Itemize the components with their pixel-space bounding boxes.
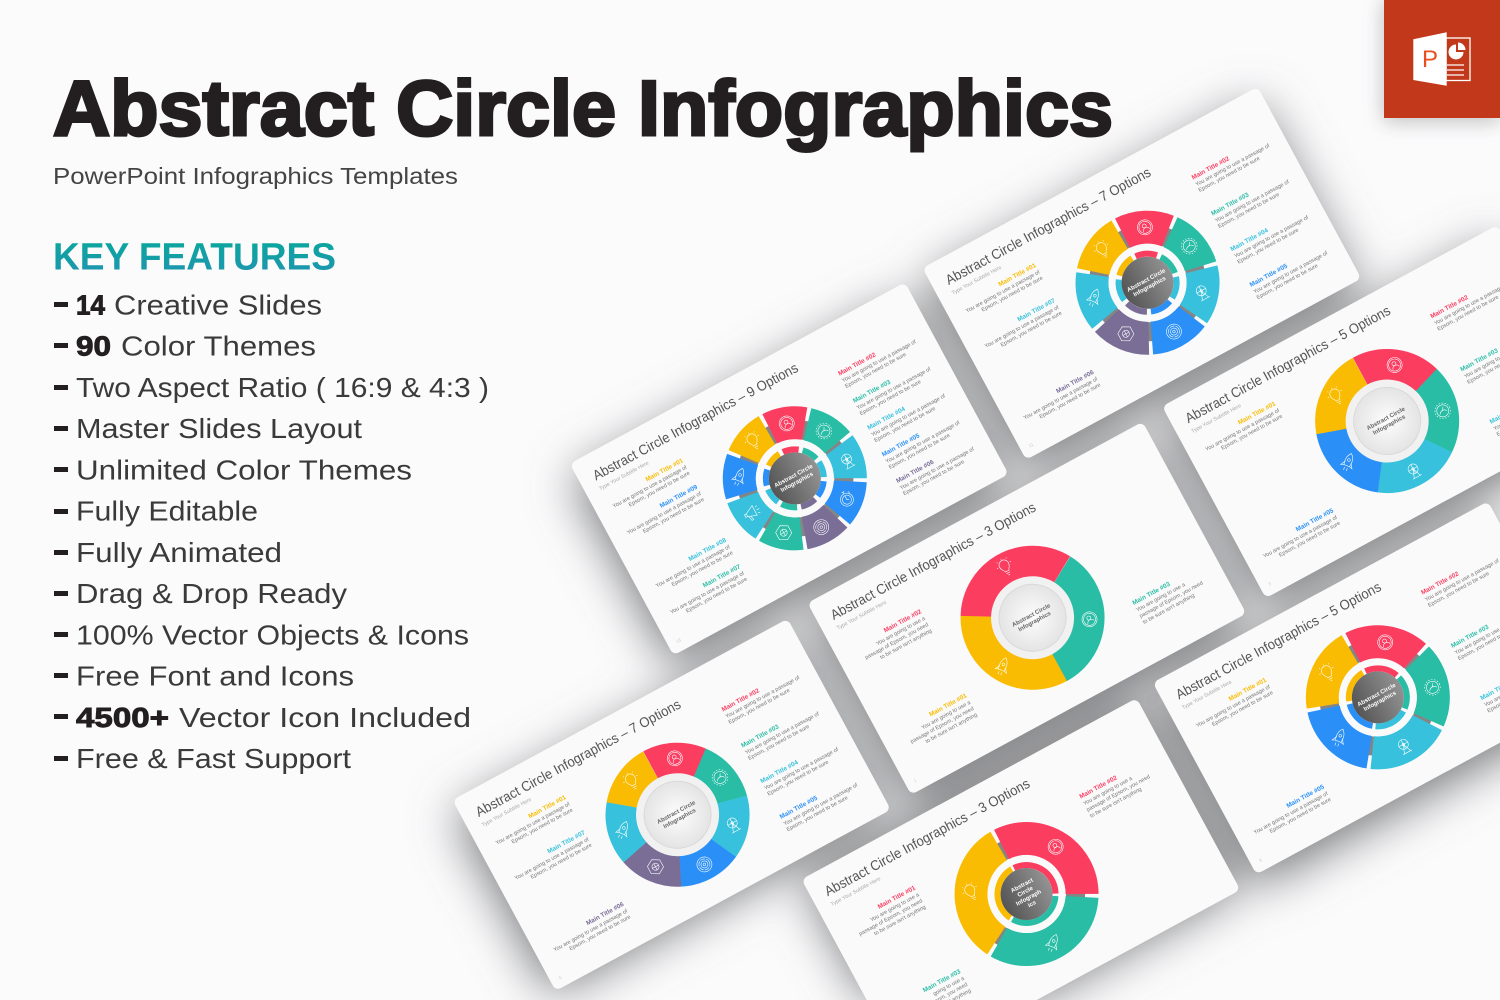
- text: main title 03: to be sure isn't anything: [1142, 593, 1196, 626]
- slide title: Abstract Circle Infographics – 3 Options: [828, 499, 1038, 623]
- gap shading: [728, 412, 861, 545]
- feature: aspect ratio: Two Aspect Ratio ( 16:9 & 4:3 ): [76, 372, 489, 403]
- text: main title 03: Main Title #03: [740, 723, 781, 750]
- icon: stopwatch: [837, 489, 856, 508]
- text: main title 02: to be sure isn't anything: [879, 628, 933, 661]
- slide title: Abstract Circle Infographics – 5 Options: [1173, 578, 1384, 702]
- feature: 4500+ vector icon: Vector Icon Included: [179, 702, 471, 733]
- center disc: Infographics: [663, 808, 698, 830]
- feature: 4500+ vector icon: 4500+: [76, 702, 169, 733]
- slide: 3 options with hub: [801, 698, 1240, 1000]
- text: main title 05: Main Title #05: [1285, 783, 1326, 810]
- icon: maze: [811, 517, 831, 537]
- icon: gauge: [813, 420, 835, 442]
- feature: fully animated: Fully Animated: [76, 537, 282, 568]
- text: main title 03: Main Title #03: [1210, 191, 1251, 218]
- text: main title 01: [851, 884, 928, 944]
- page number: 9: [1258, 857, 1263, 863]
- icon: PowerPoint logo: P: [1422, 46, 1438, 73]
- icon: badge: [1045, 837, 1066, 857]
- text: main title 05: Main Title #05: [1249, 263, 1289, 289]
- slide: 5 options with hub: [1153, 501, 1500, 874]
- center hub: [991, 859, 1062, 929]
- text: main title 01: Epsom, you need to be sure: [1220, 414, 1284, 452]
- icon: bulb: [994, 555, 1016, 578]
- text: main title 01: Main Title #01: [997, 262, 1038, 288]
- slide title: Abstract Circle Infographics – 5 Options: [1182, 302, 1393, 426]
- text: main title 06: Main Title #06: [1055, 369, 1096, 395]
- wheel: 3 wedges: [928, 513, 1137, 722]
- icon: rocket: [994, 656, 1012, 677]
- icon: rocket: [1331, 727, 1348, 748]
- text: main title 02: Main Title #02: [721, 687, 761, 713]
- slide: 3 options with disc: [807, 422, 1246, 795]
- text: main title 05: Main Title #05: [881, 432, 921, 458]
- icon: bulb: [1091, 238, 1113, 261]
- feature: free font and icons: Free Font and Icons: [76, 660, 354, 692]
- text: main title 06: Main Title #06: [895, 459, 936, 485]
- icon: bulb: [1316, 661, 1339, 684]
- text: main title 03: Main Title #03: [1131, 581, 1172, 607]
- text: main title 07: You are going to use a passage of: [514, 837, 590, 882]
- wheel: 9 segments: [711, 395, 877, 563]
- text: main title 04: Epsom, you need to be sure: [1237, 227, 1300, 265]
- icons: [948, 532, 1101, 681]
- text: main title 03: Main Title #03: [1459, 347, 1500, 373]
- text: main title 02: [1078, 760, 1155, 819]
- white spacer: [1325, 644, 1431, 750]
- text: main title 06: Epsom, you need to be sure: [1039, 382, 1102, 420]
- text: main title 01: You are going to use a passage of: [965, 269, 1041, 315]
- icon: badge: [665, 748, 685, 768]
- feature: 4500+ vector icon: [54, 702, 471, 733]
- feature: free and fast support: Free & Fast Support: [76, 743, 351, 774]
- text: main title 06: Epsom, you need to be sure: [569, 914, 632, 952]
- text: main title 05: You are going to use a passage of: [1253, 250, 1329, 295]
- feature: 14 creative slides: Creative Slides: [114, 289, 322, 320]
- text: main title 01: Main Title #01: [527, 794, 568, 820]
- center disc: Abstract Circle: [656, 800, 697, 826]
- text: main title 02: Main Title #02: [1191, 155, 1231, 181]
- icon: maze: [694, 854, 715, 875]
- text: main title 01: Epsom, you need to be sure: [628, 471, 691, 509]
- icons: [591, 731, 763, 902]
- icon: gauge: [1432, 400, 1453, 421]
- center hub: Abstract Circle: [1357, 682, 1398, 708]
- text: main title 05: You are going to use a passage of: [783, 782, 859, 827]
- subtitle: PowerPoint Infographics Templates: [53, 163, 458, 189]
- feature: unlimited color themes: Unlimited Color Themes: [76, 454, 412, 485]
- center disc: Infographics: [1018, 611, 1053, 633]
- text: main title 01: passage of Epsom, you need: [858, 898, 924, 937]
- text: main title 04: You are going to use a passage of: [1233, 215, 1310, 260]
- center hub: Abstract: [1010, 878, 1034, 895]
- white spacer: [1095, 230, 1200, 336]
- feature: drag and drop: Drag & Drop Ready: [76, 578, 347, 609]
- slide subtitle: Type Your Subtitle Here: [830, 876, 882, 908]
- wheel: 5 wedges: [1304, 342, 1471, 508]
- text: main title 05: You are going to use a passage of: [1253, 791, 1330, 836]
- center disc: Abstract Circle: [1366, 406, 1407, 432]
- text: main title 04: [1479, 656, 1500, 714]
- heading: key features: KEY FEATURES: [53, 236, 336, 278]
- text: main title 03: going to use a: [932, 975, 966, 997]
- text: main title 03: Main Title #03: [852, 379, 892, 405]
- text: main title 03: You are going to use a passage of: [856, 366, 932, 411]
- text: main title 04: Main Title #04: [1229, 227, 1270, 253]
- text: main title 09: You are going to use a passage of: [626, 491, 703, 536]
- slide title: Abstract Circle Infographics – 7 Options: [943, 164, 1153, 288]
- text: main title 02: Main Title #02: [837, 351, 878, 378]
- text: main title 02: passage of Epsom, you need: [1086, 774, 1151, 813]
- center hub: [760, 443, 830, 514]
- panel: PowerPoint badge: [1384, 0, 1500, 118]
- page number: 1: [913, 778, 918, 783]
- text: main title 01: to be sure isn't anything: [873, 904, 927, 937]
- text: main title 05: You are going to use a passage of: [1262, 515, 1339, 560]
- feature: 90 color themes: [54, 330, 316, 362]
- center disc: Abstract Circle: [1011, 603, 1052, 629]
- feature: 14 creative slides: 14: [76, 289, 105, 320]
- inner ring segments: [756, 439, 834, 518]
- slide background: [922, 87, 1361, 460]
- icon: rocket: [1339, 451, 1357, 473]
- icon: bulb: [959, 880, 982, 903]
- text: main title 05: Main Title #05: [779, 795, 819, 821]
- text: main title 02: Epsom, you need to be sure: [1198, 156, 1261, 194]
- page number: 11: [1028, 442, 1035, 448]
- gap shading: [1081, 216, 1214, 349]
- icon: hexagon: [1116, 323, 1136, 344]
- icon: maze: [1164, 321, 1184, 342]
- text: main title 02: Epsom, you need to be sure: [1437, 295, 1500, 333]
- text: main title 01: You are going to use a: [869, 892, 921, 924]
- text: main title 04: You are going to use a passage of: [763, 747, 840, 792]
- text: main title 07: Main Title #07: [546, 829, 587, 855]
- icon: rocket: [1044, 932, 1062, 953]
- feature: master slides layout: Master Slides Layout: [76, 413, 362, 444]
- text: main title 04: Epsom, you need to be sure: [873, 406, 937, 444]
- text: main title 03: Epsom, you need to be sure: [1217, 192, 1281, 230]
- center hub: Circle: [1017, 885, 1035, 899]
- text: main title 04: Main Title #04: [866, 405, 907, 432]
- gap shading: [960, 828, 1093, 960]
- outer ring segments: [1303, 622, 1453, 773]
- text: main title 02: You are going to use a passage of: [1424, 558, 1500, 603]
- slide: 7 options lower with disc: [452, 619, 891, 991]
- center hub: [1343, 662, 1413, 733]
- text: main title 07: Epsom, you need to be sure: [685, 577, 749, 615]
- text: main title 02: You are going to use a passage of: [725, 675, 801, 720]
- icon: gauge: [1422, 677, 1443, 698]
- text: main title 02: You are going to use a passage of: [1195, 143, 1271, 188]
- slide subtitle: Type Your Subtitle Here: [951, 265, 1003, 297]
- slide title: Abstract Circle Infographics – 7 Options: [473, 696, 683, 820]
- feature list: [54, 289, 489, 774]
- icon: gauge: [1179, 236, 1200, 257]
- slide background: [1153, 501, 1500, 874]
- text: main title 02: Main Title #02: [1420, 570, 1461, 597]
- icon: badge: [1384, 355, 1405, 375]
- slide subtitle: Type Your Subtitle Here: [836, 600, 888, 632]
- icon: badge: [1079, 609, 1100, 629]
- center hub: Abstract Circle: [774, 463, 815, 489]
- icon: megaphone: [742, 503, 763, 522]
- inner ring segments: [987, 855, 1066, 933]
- feature: 90 color themes: Color Themes: [121, 330, 316, 362]
- soft shadow behind slides: [454, 103, 1500, 1000]
- page number: 3: [1267, 581, 1273, 587]
- text: main title 04: Epsom, you need to be sure: [767, 759, 830, 797]
- text: main title 01: Main Title #01: [877, 884, 917, 911]
- icon: ferris wheel: [840, 452, 855, 469]
- slide: 7 options top: [922, 87, 1361, 460]
- title: Abstract Circle Infographics: [53, 64, 1113, 152]
- text: main title 05: Epsom, you need to be sure: [1269, 797, 1332, 835]
- center hub: Abstract Circle: [1126, 268, 1167, 294]
- text: main title 07: Epsom, you need to be sure: [1000, 311, 1063, 349]
- slide subtitle: Type Your Subtitle Here: [481, 797, 533, 829]
- text: main title 02: Main Title #02: [1429, 294, 1470, 320]
- feature: vector objects: 100% Vector Objects & Icons: [76, 619, 469, 650]
- ring wedges: [955, 540, 1110, 695]
- icons: [1304, 343, 1471, 508]
- text: main title 08: Main Title #08: [687, 537, 728, 563]
- text: main title 01: Main Title #01: [644, 457, 685, 483]
- text: main title 09: Main Title #09: [659, 484, 699, 510]
- ring wedges: [601, 738, 754, 891]
- text: main title 02: You are going to use a: [1082, 775, 1134, 807]
- outer ring segments: [951, 819, 1102, 969]
- slide background: [570, 282, 1009, 655]
- text: main title 04: Main Title #04: [759, 759, 800, 785]
- text: main title 06: You are going to use a passage of: [1023, 376, 1099, 421]
- center disc: Infographics: [1372, 414, 1407, 437]
- feature: 90 color themes: 90: [76, 330, 111, 362]
- text: main title 01: to be sure isn't anything: [925, 712, 978, 745]
- slide subtitle: Type Your Subtitle Here: [598, 460, 650, 492]
- icon: rocket: [730, 466, 748, 487]
- text: main title 04: [1489, 380, 1500, 438]
- text: main title 02: to be sure isn't anything: [1089, 787, 1143, 819]
- text: main title 01: Epsom, you need to be sure: [981, 275, 1044, 313]
- outer ring segments: [720, 403, 870, 554]
- slide title: Abstract Circle Infographics – 3 Options: [822, 775, 1032, 899]
- text: main title 03: [1459, 327, 1500, 386]
- slide subtitle: Type Your Subtitle Here: [1191, 403, 1242, 435]
- inner ring segments: [1108, 243, 1187, 322]
- text: main title 01: Epsom, you need to be sure: [511, 807, 574, 845]
- feature: fully editable: Fully Editable: [76, 496, 258, 526]
- text: main title 05: Epsom, you need to be sure: [1256, 263, 1319, 301]
- text: main title 03: You are going to use a: [1135, 582, 1187, 613]
- text: main title 01: You are going to use a passage of: [1205, 408, 1281, 453]
- icon: ferris wheel: [1406, 462, 1422, 479]
- icon: rocket: [1085, 287, 1103, 308]
- text: main title 03: Epsom, you need to be sure: [859, 379, 922, 417]
- text: main title 01: You are going to use a: [921, 699, 973, 731]
- slide: 9 options: [570, 282, 1009, 655]
- badge shadow: [1384, 0, 1500, 121]
- outer ring segments: [1072, 208, 1223, 358]
- page number: 13: [675, 637, 682, 644]
- slide background: [1162, 225, 1500, 598]
- slide background: [452, 619, 891, 991]
- text: main title 05: Main Title #05: [1295, 507, 1335, 533]
- center hub: Infograph: [1015, 889, 1043, 908]
- text: main title 06: You are going to use a passage of: [553, 908, 629, 953]
- text: main title 01: Main Title #01: [928, 692, 969, 718]
- text: main title 01: passage of Epsom, you need: [910, 706, 975, 745]
- text: main title 02: Main Title #02: [883, 608, 923, 634]
- wheel: 5 segments: [1296, 620, 1461, 783]
- text: main title 03: You are going to use a passage of: [744, 711, 821, 756]
- text: main title 07: You are going to use a passage of: [669, 571, 746, 616]
- icons: [1296, 620, 1461, 783]
- gap shading: [1311, 631, 1444, 764]
- text: main title 04: You are going to use a passage of: [870, 393, 947, 438]
- text: main title 02: [857, 608, 934, 667]
- icon: badge: [1135, 217, 1155, 237]
- text: main title 02: Epsom, you need to be sure: [728, 688, 791, 726]
- text: main title 03: passage of Epsom, you need: [1139, 580, 1204, 620]
- text: main title 01: Main Title #01: [1228, 677, 1268, 703]
- center disc: [976, 561, 1089, 674]
- icon: bulb: [742, 429, 764, 452]
- text: main title 01: Epsom, you need to be sure: [1211, 690, 1274, 728]
- white spacer: [974, 841, 1079, 947]
- text: main title 03: Epsom, you need to be sure: [747, 724, 811, 762]
- text: main title 02: You are going to use a: [875, 615, 927, 647]
- text: main title 08: Epsom, you need to be sure: [671, 550, 734, 588]
- page number: 5: [558, 975, 563, 980]
- text: main title 06: Epsom, you need to be sure: [902, 459, 966, 497]
- icon: hexagon: [646, 856, 665, 877]
- text: main title 01: Main Title #01: [1237, 400, 1277, 427]
- icon: bulb: [1324, 384, 1347, 407]
- slide subtitle: Type Your Subtitle Here: [1181, 679, 1233, 711]
- center disc: [621, 758, 734, 871]
- icons: [1062, 201, 1232, 369]
- text: main title 03: [1131, 567, 1208, 626]
- slide background: [807, 422, 1246, 795]
- text: main title 07: Main Title #07: [702, 563, 742, 589]
- text: main title 08: You are going to use a passage of: [655, 544, 732, 589]
- white spacer: [742, 425, 848, 531]
- text: main title 05: Epsom, you need to be sure: [888, 433, 951, 471]
- text: main title 01: [902, 692, 979, 751]
- text: main title 06: Main Title #06: [585, 901, 626, 927]
- icon: bulb: [620, 769, 643, 792]
- icon: rocket: [614, 819, 632, 840]
- center hub: Infographics: [1133, 276, 1168, 298]
- inner ring segments: [1339, 658, 1417, 737]
- text: main title 02: passage of Epsom, you need: [864, 622, 930, 661]
- icons: [959, 834, 1107, 979]
- text: main title 05: Epsom, you need to be sure: [786, 795, 849, 833]
- text: main title 01: You are going to use a passage of: [612, 465, 689, 510]
- wheel: 3 segments: [951, 819, 1107, 979]
- text: main title 03: [921, 968, 973, 1000]
- center disc: [1331, 365, 1443, 477]
- slide background: [801, 698, 1240, 1000]
- text: main title 07: Main Title #07: [1016, 297, 1057, 323]
- text: main title 07: Epsom, you need to be sure: [530, 843, 593, 881]
- icon: ferris wheel: [725, 816, 741, 833]
- text: main title 02: Main Title #02: [1078, 774, 1119, 801]
- icon: gauge: [709, 767, 731, 788]
- icon: ferris wheel: [1194, 284, 1210, 301]
- center hub: Infographics: [1363, 690, 1398, 713]
- ring wedges: [1311, 344, 1464, 498]
- text: main title 03: Main Title #03: [922, 968, 962, 994]
- center hub: ics: [1027, 900, 1038, 909]
- icon: badge: [1375, 632, 1395, 652]
- icon: badge: [777, 413, 797, 434]
- slide title: Abstract Circle Infographics – 9 Options: [590, 359, 801, 483]
- icon: ferris wheel: [1397, 738, 1412, 755]
- text: main title 01: You are going to use a passage of: [1195, 684, 1272, 729]
- text: main title 07: You are going to use a passage of: [984, 305, 1060, 350]
- text: main title 09: Epsom, you need to be sure: [642, 497, 705, 535]
- text: main title 02: Epsom, you need to be sure: [844, 352, 908, 390]
- text: main title 02: Epsom, you need to be sure: [1427, 571, 1491, 609]
- center hub: Infographics: [780, 471, 815, 494]
- text: main title 05: You are going to use a passage of: [885, 420, 961, 465]
- icons: [711, 395, 877, 563]
- text: main title 02: You are going to use a passage of: [841, 339, 918, 384]
- slide: 5 options with disc: [1162, 225, 1500, 598]
- text: main title 03: Main Title #03: [1450, 623, 1490, 650]
- text: main title 06: You are going to use a passage of: [899, 446, 976, 491]
- wheel: 7 segments: [1062, 201, 1232, 369]
- wheel: 7 wedges: [591, 731, 763, 902]
- text: main title 05: Epsom, you need to be sure: [1278, 521, 1342, 559]
- center hub: [1112, 247, 1183, 318]
- text: main title 03: You are going to use a passage of: [1214, 179, 1291, 224]
- text: main title 01: You are going to use a passage of: [495, 801, 571, 847]
- icon: hexagon: [774, 522, 794, 543]
